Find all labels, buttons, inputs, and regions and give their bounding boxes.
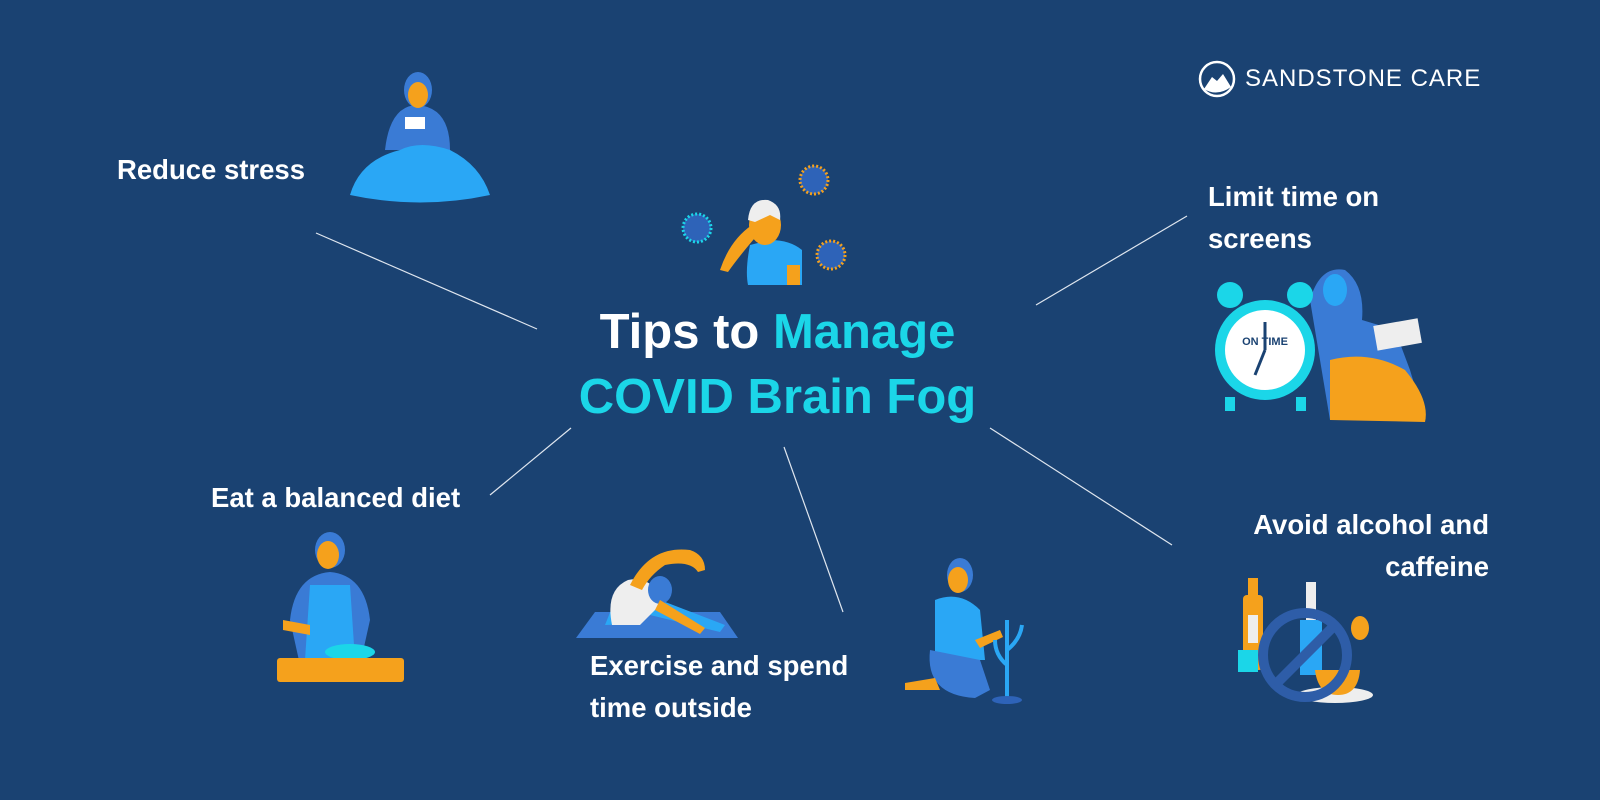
title: COVID Brain Fog <box>579 370 976 424</box>
logo <box>1198 60 1481 98</box>
title: Tips to Manage <box>600 305 955 359</box>
panel: exercise: Exercise and spend <box>590 650 848 681</box>
icon: clock and person: ON TIME <box>1242 336 1288 348</box>
title <box>579 305 976 424</box>
panel: diet: Eat a balanced diet <box>211 482 460 513</box>
panel: limit screens: Limit time on <box>1208 181 1379 212</box>
panel: alcohol caffeine: caffeine <box>1385 551 1489 582</box>
panel: reduce stress: Reduce stress <box>117 154 305 185</box>
panel: exercise: time outside <box>590 692 752 723</box>
panel: limit screens: screens <box>1208 223 1312 254</box>
panel: alcohol caffeine: Avoid alcohol and <box>1253 509 1489 540</box>
panel: alcohol caffeine <box>1253 509 1489 582</box>
panel: exercise <box>590 650 848 723</box>
logo: SANDSTONE CARE <box>1245 65 1481 92</box>
panel: limit screens <box>1208 181 1379 254</box>
